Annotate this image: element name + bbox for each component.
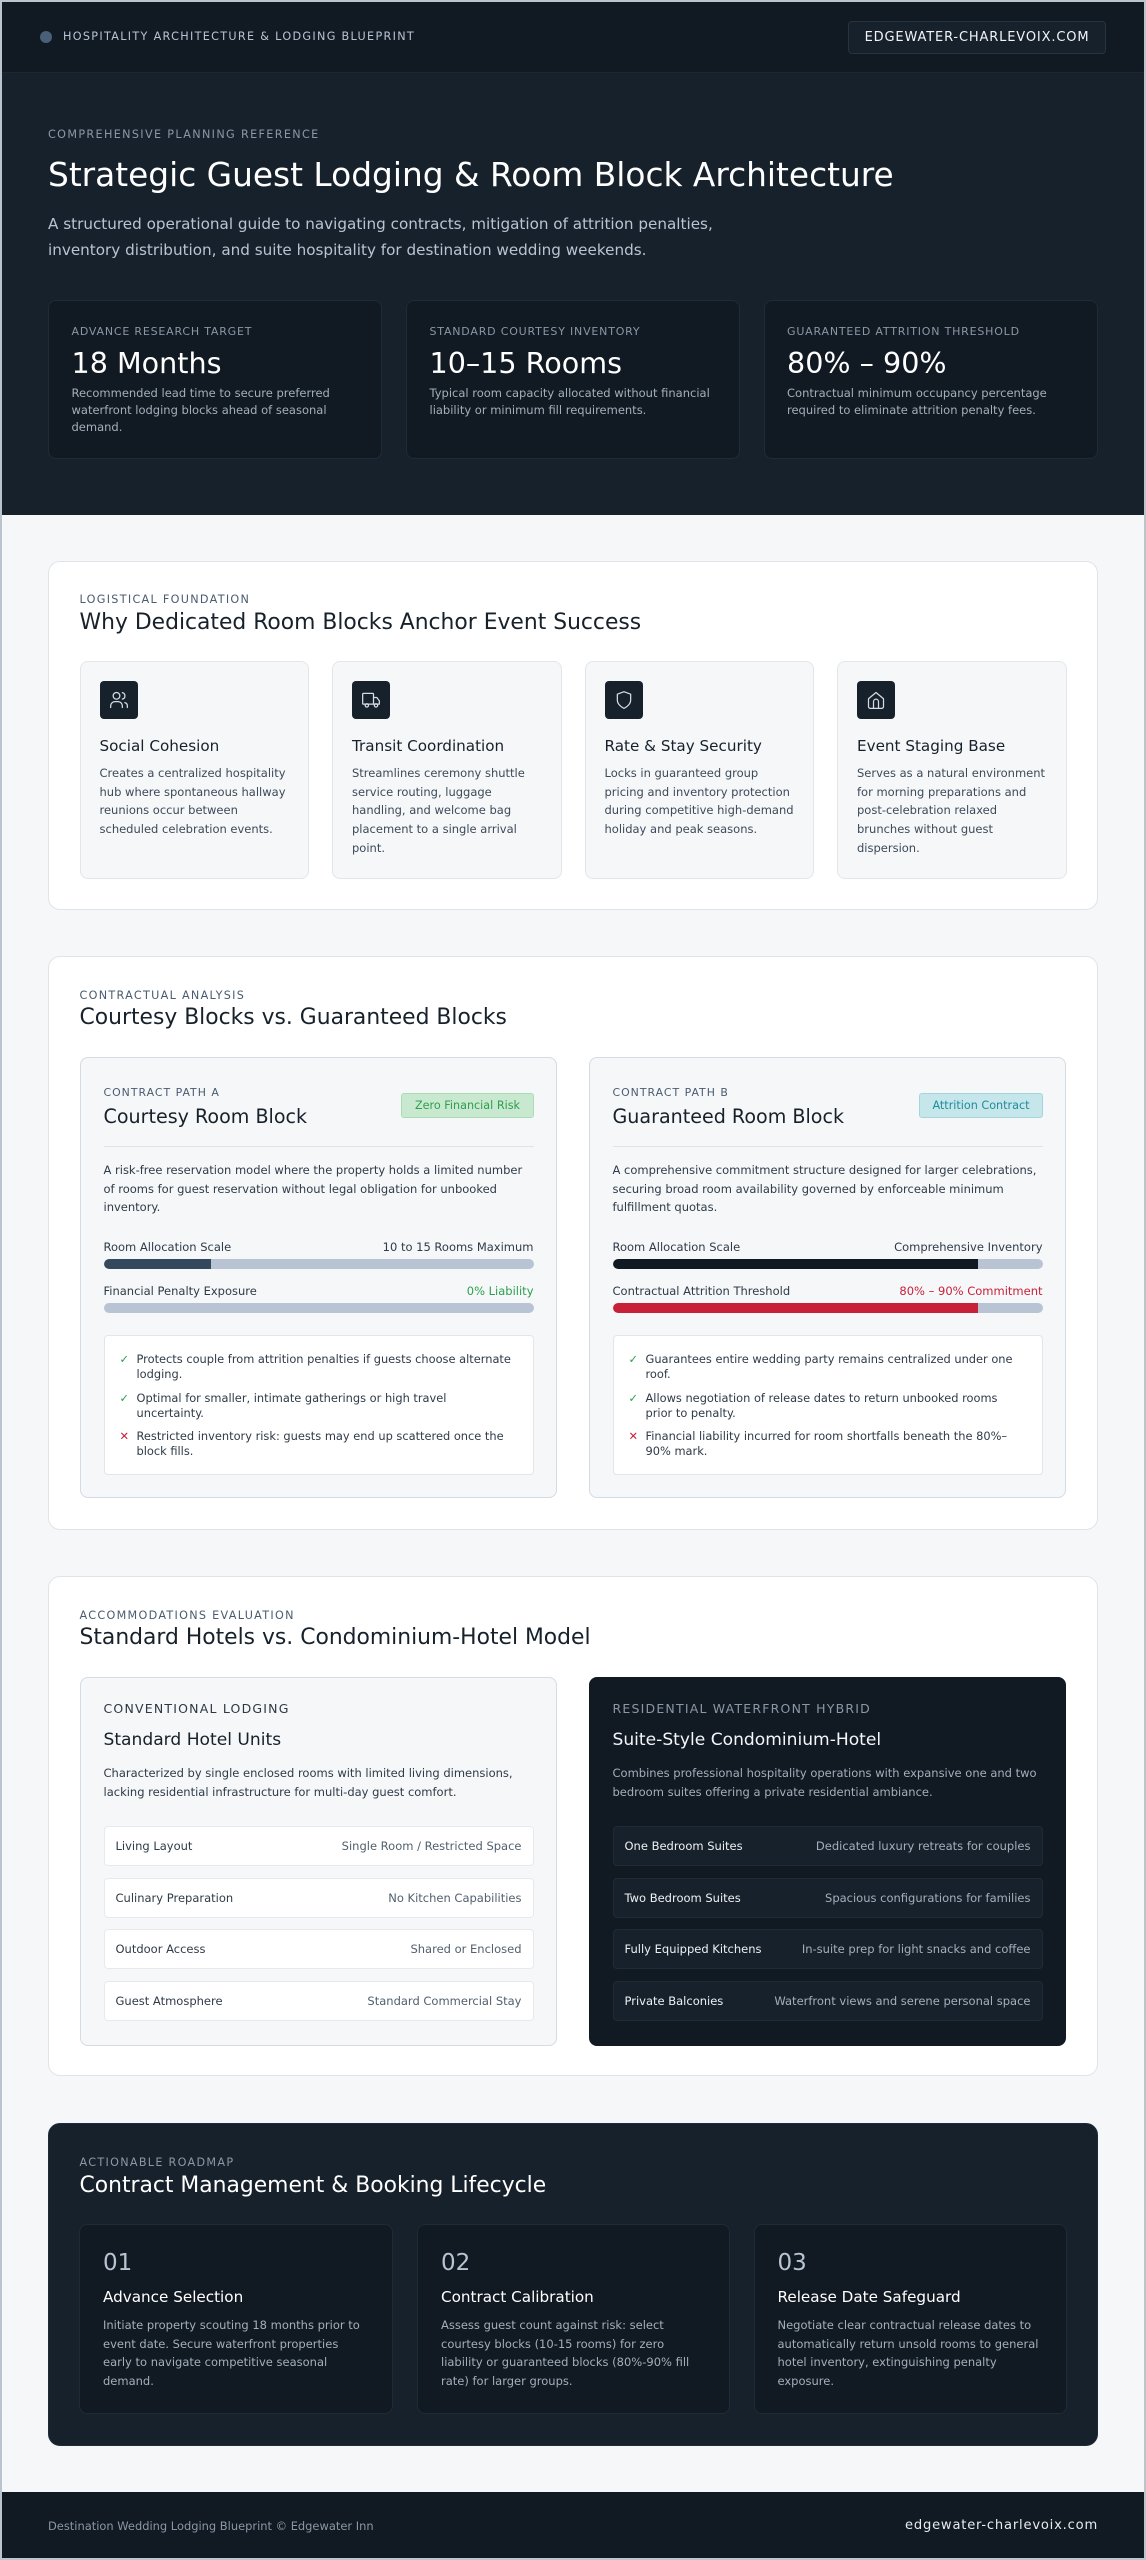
stat card: research target: Recommended lead time to secure preferred xyxy=(72,386,330,400)
row: culinary preparation: No Kitchen Capabilities xyxy=(388,1890,522,1904)
step card 02: 02 xyxy=(441,2250,470,2276)
section heading: courtesy vs guaranteed: Courtesy Blocks vs. Guaranteed Blocks xyxy=(80,1005,507,1030)
section heading: hotels vs condo-hotel: Standard Hotels vs. Condominium-Hotel Model xyxy=(80,1625,591,1650)
section label: logistical foundation: LOGISTICAL FOUNDATION xyxy=(80,593,250,606)
step card 03: hotel inventory, extinguishing penalty xyxy=(778,2355,997,2369)
panel: contractual analysis xyxy=(48,956,1098,1530)
panel: accommodations evaluation xyxy=(48,1576,1098,2076)
stat card: research target: 18 Months xyxy=(72,346,222,380)
feature card: event staging base: Event Staging Base xyxy=(857,737,1005,755)
stat card: courtesy inventory: Typical room capacity allocated without financial xyxy=(430,386,710,400)
section heading: booking lifecycle: Contract Management & Booking Lifecycle xyxy=(80,2172,546,2198)
meter: room allocation: Comprehensive Inventory xyxy=(894,1240,1042,1254)
pros and cons list: lodging. xyxy=(136,1367,182,1381)
pros and cons list: ✓ xyxy=(628,1390,638,1404)
row: living layout xyxy=(104,1826,534,1866)
card title: Standard Hotel Units xyxy=(104,1730,281,1750)
row: two bedroom suites: Two Bedroom Suites xyxy=(624,1890,741,1904)
meter: financial penalty xyxy=(104,1284,534,1313)
meter: room allocation xyxy=(104,1240,534,1269)
comparison panel: standard hotel xyxy=(80,1677,557,2046)
section label: actionable roadmap: ACTIONABLE ROADMAP xyxy=(80,2156,234,2168)
icon: house xyxy=(857,681,895,719)
row: one bedroom suites xyxy=(612,1826,1042,1866)
footer xyxy=(2,2492,1144,2558)
row: private balconies: Private Balconies xyxy=(624,1994,723,2008)
meter: contractual attrition: 80% – 90% Commitment xyxy=(899,1284,1042,1298)
icon: people xyxy=(100,681,138,719)
status dot xyxy=(40,31,52,43)
badge: attrition contract: Attrition Contract xyxy=(932,1099,1030,1112)
meter: room allocation xyxy=(612,1240,1043,1269)
row: fully equipped kitchens xyxy=(612,1929,1042,1969)
feature card: transit coordination: Streamlines ceremony shuttle xyxy=(352,766,525,780)
contract description: A risk-free reservation model where the property holds a limited number xyxy=(104,1163,522,1177)
step card 01: event date. Secure waterfront properties xyxy=(103,2337,338,2351)
top bar label: HOSPITALITY ARCHITECTURE & LODGING BLUEPRINT xyxy=(63,30,415,43)
feature card: rate and stay security: holiday and peak seasons. xyxy=(604,822,757,836)
row: private balconies: Waterfront views and serene personal space xyxy=(774,1994,1030,2008)
feature card: event staging base: post-celebration relaxed xyxy=(857,803,997,817)
feature card: social cohesion xyxy=(80,661,309,879)
row: one bedroom suites: Dedicated luxury retreats for couples xyxy=(816,1839,1030,1853)
stat card: attrition threshold: Contractual minimum occupancy percentage xyxy=(787,386,1047,400)
badge: attrition contract xyxy=(919,1093,1043,1118)
row: outdoor access xyxy=(104,1929,534,1969)
meter: contractual attrition: Contractual Attrition Threshold xyxy=(612,1284,790,1298)
eyebrow: residential waterfront hybrid: RESIDENTIAL WATERFRONT HYBRID xyxy=(612,1701,871,1716)
domain pill: EDGEWATER-CHARLEVOIX.COM xyxy=(865,30,1089,45)
feature card: event staging base: brunches without guest xyxy=(857,822,993,836)
pros and cons list: Optimal for smaller, intimate gatherings or high travel xyxy=(136,1390,446,1404)
step card 03: exposure. xyxy=(778,2374,834,2388)
step card 02: rate) for larger groups. xyxy=(441,2374,573,2388)
stat card: courtesy inventory: 10–15 Rooms xyxy=(430,346,622,380)
pros and cons list: ✕ xyxy=(120,1429,129,1443)
pros and cons list xyxy=(612,1335,1042,1475)
comparison panel: condominium hotel xyxy=(588,1677,1066,2046)
row: one bedroom suites: One Bedroom Suites xyxy=(624,1839,743,1853)
contract title: Guaranteed Room Block xyxy=(612,1105,844,1128)
contract panel: guaranteed room block xyxy=(588,1057,1066,1498)
pros and cons list: block fills. xyxy=(136,1444,193,1458)
card description xyxy=(612,1766,1037,1799)
card description xyxy=(104,1766,513,1799)
row: guest atmosphere: Guest Atmosphere xyxy=(116,1994,223,2008)
feature card: transit coordination: point. xyxy=(352,841,385,855)
hero subtitle: A structured operational guide to navigating contracts, mitigation of attrition penalties, xyxy=(48,215,713,233)
step card 02: liability or guaranteed blocks (80%-90% fill xyxy=(441,2355,689,2369)
feature card: rate and stay security: Locks in guaranteed group xyxy=(604,766,758,780)
feature card: transit coordination: handling, and welcome bag xyxy=(352,803,511,817)
feature card: transit coordination: Transit Coordination xyxy=(352,737,504,755)
contract description xyxy=(104,1163,522,1214)
badge: zero financial risk: Zero Financial Risk xyxy=(415,1099,520,1112)
feature card: transit coordination: placement to a single arrival xyxy=(352,822,517,836)
contract description: of rooms for guest reservation without legal obligation for unbooked xyxy=(104,1182,497,1196)
divider xyxy=(104,1146,534,1147)
step card 01: early to navigate competitive seasonal xyxy=(103,2355,327,2369)
stat card: courtesy inventory: STANDARD COURTESY INVENTORY xyxy=(430,325,640,338)
domain pill xyxy=(848,21,1106,54)
pros and cons list xyxy=(104,1335,534,1475)
row: fully equipped kitchens: Fully Equipped Kitchens xyxy=(624,1942,762,1956)
meter: room allocation: Room Allocation Scale xyxy=(104,1240,231,1254)
eyebrow: conventional lodging: CONVENTIONAL LODGING xyxy=(104,1701,290,1716)
step card 03: Release Date Safeguard xyxy=(778,2288,961,2306)
step card 01: demand. xyxy=(103,2374,154,2388)
contract description xyxy=(612,1163,1036,1214)
step card 02 xyxy=(417,2224,730,2414)
row: living layout: Living Layout xyxy=(116,1839,192,1853)
pros and cons list: uncertainty. xyxy=(136,1406,204,1420)
meter: contractual attrition xyxy=(612,1284,1043,1313)
stat card: courtesy inventory xyxy=(406,300,740,459)
feature card: event staging base: dispersion. xyxy=(857,841,920,855)
row: outdoor access: Outdoor Access xyxy=(116,1942,205,1956)
row: guest atmosphere xyxy=(104,1981,534,2021)
section label: accommodations evaluation: ACCOMMODATIONS EVALUATION xyxy=(80,1608,295,1622)
meter: financial penalty: 0% Liability xyxy=(467,1284,534,1298)
feature card: rate and stay security xyxy=(584,661,814,879)
feature card: event staging base xyxy=(837,661,1066,879)
stat card: attrition threshold: GUARANTEED ATTRITION THRESHOLD xyxy=(787,325,1020,338)
feature card: rate and stay security: pricing and inventory protection xyxy=(604,785,790,799)
divider xyxy=(612,1146,1042,1147)
section heading: room blocks: Why Dedicated Room Blocks Anchor Event Success xyxy=(80,610,641,635)
stat card: research target: ADVANCE RESEARCH TARGET xyxy=(72,325,252,338)
meter: room allocation: Room Allocation Scale xyxy=(612,1240,740,1254)
feature card: social cohesion: Social Cohesion xyxy=(100,737,219,755)
pros and cons list: 90% mark. xyxy=(646,1444,707,1458)
hero subtitle xyxy=(48,215,713,258)
stat card: research target: demand. xyxy=(72,420,122,434)
step card 02: courtesy blocks (10-15 rooms) for zero xyxy=(441,2337,664,2351)
feature card: social cohesion: Creates a centralized hospitality xyxy=(100,766,286,780)
main title: Strategic Guest Lodging & Room Block Architecture xyxy=(48,156,894,194)
top navigation bar xyxy=(2,2,1144,73)
row: private balconies xyxy=(612,1981,1042,2021)
contract title: Courtesy Room Block xyxy=(104,1105,307,1128)
row: living layout: Single Room / Restricted Space xyxy=(342,1839,522,1853)
contract description: securing broad room availability governed by enforceable minimum xyxy=(612,1182,1004,1196)
contract path label: CONTRACT PATH B xyxy=(612,1086,729,1099)
contract description: fulfillment quotas. xyxy=(612,1200,717,1214)
meter: room allocation: 10 to 15 Rooms Maximum xyxy=(383,1240,534,1254)
pros and cons list: Restricted inventory risk: guests may end up scattered once the xyxy=(136,1429,504,1443)
card description: bedroom suites offering a private residential ambiance. xyxy=(612,1785,933,1799)
stat card: research target: waterfront lodging blocks ahead of seasonal xyxy=(72,403,327,417)
step card 01: 01 xyxy=(103,2250,132,2276)
card description: Combines professional hospitality operations with expansive one and two xyxy=(612,1766,1037,1780)
row: culinary preparation xyxy=(104,1878,534,1918)
hero eyebrow: COMPREHENSIVE PLANNING REFERENCE xyxy=(48,128,320,141)
hero subtitle: inventory distribution, and suite hospitality for destination wedding weekends. xyxy=(48,240,646,258)
step card 03: automatically return unsold rooms to general xyxy=(778,2337,1038,2351)
pros and cons list: Financial liability incurred for room shortfalls beneath the 80%– xyxy=(646,1429,1007,1443)
stat card: courtesy inventory: liability or minimum fill requirements. xyxy=(430,403,646,417)
step card 01: Initiate property scouting 18 months prior to xyxy=(103,2318,360,2332)
feature card: social cohesion: scheduled celebration events. xyxy=(100,822,273,836)
contract description: inventory. xyxy=(104,1200,160,1214)
pros and cons list: roof. xyxy=(646,1367,671,1381)
pros and cons list: prior to penalty. xyxy=(646,1406,736,1420)
stat card: research target xyxy=(48,300,382,459)
pros and cons list: ✓ xyxy=(120,1352,129,1366)
row: guest atmosphere: Standard Commercial Stay xyxy=(367,1994,522,2008)
card description: Characterized by single enclosed rooms with limited living dimensions, xyxy=(104,1766,513,1780)
pros and cons list: Guarantees entire wedding party remains centralized under one xyxy=(646,1352,1013,1366)
feature card: transit coordination xyxy=(332,661,562,879)
footer domain: edgewater-charlevoix.com xyxy=(905,2518,1098,2533)
stat card: attrition threshold xyxy=(764,300,1098,459)
step card 01 xyxy=(79,2224,393,2414)
step card 02: Contract Calibration xyxy=(441,2288,594,2306)
stat card: attrition threshold: required to eliminate attrition penalty fees. xyxy=(787,403,1036,417)
hero section xyxy=(2,73,1144,515)
icon: shield xyxy=(604,681,642,719)
contract path label: CONTRACT PATH A xyxy=(104,1086,220,1099)
feature card: event staging base: for morning preparations and xyxy=(857,785,1026,799)
icon: truck xyxy=(352,681,390,719)
contract description: A comprehensive commitment structure designed for larger celebrations, xyxy=(612,1163,1036,1177)
feature card: event staging base: Serves as a natural environment xyxy=(857,766,1045,780)
row: fully equipped kitchens: In-suite prep for light snacks and coffee xyxy=(802,1942,1030,1956)
feature card: rate and stay security: Rate & Stay Security xyxy=(604,737,762,755)
step card 03 xyxy=(754,2224,1066,2414)
step card 03: Negotiate clear contractual release dates to xyxy=(778,2318,1031,2332)
panel: actionable roadmap xyxy=(48,2123,1098,2446)
step card 01: Advance Selection xyxy=(103,2288,243,2306)
meter: financial penalty: Financial Penalty Exposure xyxy=(104,1284,257,1298)
stat card: attrition threshold: 80% – 90% xyxy=(787,346,947,380)
row: outdoor access: Shared or Enclosed xyxy=(410,1942,522,1956)
row: two bedroom suites: Spacious configurations for families xyxy=(825,1890,1030,1904)
feature card: social cohesion: reunions occur between xyxy=(100,803,238,817)
pros and cons list: ✕ xyxy=(628,1429,638,1443)
card title: Suite-Style Condominium-Hotel xyxy=(612,1730,881,1750)
footer credit: Destination Wedding Lodging Blueprint © Edgewater Inn xyxy=(48,2519,374,2533)
feature card: transit coordination: service routing, luggage xyxy=(352,785,492,799)
feature card: rate and stay security: during competitive high-demand xyxy=(604,803,794,817)
step card 03: 03 xyxy=(778,2250,807,2276)
pros and cons list: ✓ xyxy=(120,1390,129,1404)
row: culinary preparation: Culinary Preparation xyxy=(116,1890,233,1904)
pros and cons list: Allows negotiation of release dates to return unbooked rooms xyxy=(646,1390,998,1404)
section label: contractual analysis: CONTRACTUAL ANALYSIS xyxy=(80,988,245,1002)
row: two bedroom suites xyxy=(612,1878,1042,1918)
contract panel: courtesy room block xyxy=(80,1057,557,1498)
feature card: social cohesion: hub where spontaneous hallway xyxy=(100,785,286,799)
card description: lacking residential infrastructure for multi-day guest comfort. xyxy=(104,1785,456,1799)
pros and cons list: ✓ xyxy=(628,1352,638,1366)
panel: logistical foundation xyxy=(48,561,1098,910)
badge: zero financial risk xyxy=(401,1093,534,1118)
pros and cons list: Protects couple from attrition penalties if guests choose alternate xyxy=(136,1352,511,1366)
step card 02: Assess guest count against risk: select xyxy=(441,2318,664,2332)
